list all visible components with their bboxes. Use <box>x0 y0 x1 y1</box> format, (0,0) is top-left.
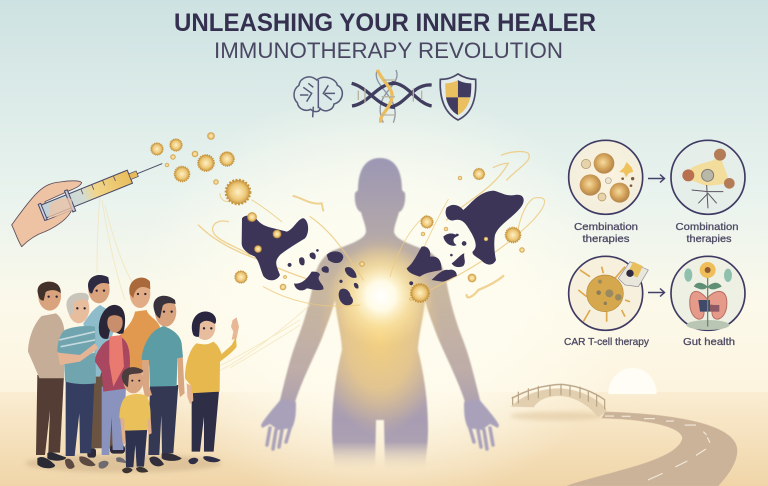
ground shadow <box>25 454 222 473</box>
swirls to family <box>97 195 310 382</box>
bridge shadow <box>510 412 603 420</box>
road dashes <box>605 416 710 480</box>
orange shirt man <box>110 278 160 454</box>
icon: shield <box>440 74 476 120</box>
background ground <box>0 392 768 486</box>
label: combination therapies left <box>574 221 638 245</box>
left hand <box>261 399 296 449</box>
fragments left <box>288 249 359 305</box>
arrow <box>648 174 664 182</box>
grey haired woman <box>57 293 98 469</box>
hand back <box>12 181 82 247</box>
left man <box>28 281 66 468</box>
label: combination therapies left: Cembination <box>574 221 638 233</box>
human silhouette <box>261 158 499 470</box>
woman in pink <box>95 305 130 469</box>
sun <box>608 368 657 394</box>
circle: combination cells <box>569 140 643 214</box>
title: UNLEASHING YOUR INNER HEALER <box>174 9 596 37</box>
man in teal shirt <box>142 296 185 466</box>
label: gut health: Gut health <box>683 336 735 348</box>
label: CAR T-cell therapy: CAR T-cell therapy <box>564 336 650 348</box>
circle: CAR T-cell <box>569 256 648 330</box>
right tumour <box>446 191 524 265</box>
dark tumour masses <box>242 191 524 305</box>
syringe and hand <box>12 153 167 247</box>
icon: DNA helix <box>352 70 432 123</box>
circle: gut health <box>671 256 745 330</box>
panel: therapy circles <box>564 140 745 348</box>
arrow <box>648 288 664 296</box>
label: combination therapies right: Combination <box>676 221 739 233</box>
right hand <box>464 399 499 449</box>
immune cells <box>151 132 524 302</box>
label: combination therapies left: therapies <box>582 233 630 245</box>
energy swirls <box>198 152 545 306</box>
back man <box>83 275 115 458</box>
circle: combination network <box>671 140 745 214</box>
icon: brain <box>294 77 342 117</box>
family group <box>25 275 239 473</box>
subtitle: IMMUNOTHERAPY REVOLUTION <box>214 38 563 63</box>
label: combination therapies right <box>676 221 739 245</box>
bridge <box>511 384 607 417</box>
label: combination therapies right: therapies <box>686 233 732 245</box>
left tumour <box>242 216 308 280</box>
road <box>566 412 737 486</box>
fragments right <box>407 234 466 285</box>
syringe body <box>37 153 167 223</box>
child in yellow <box>119 367 152 473</box>
chest light burst <box>329 244 433 348</box>
road and bridge <box>510 368 737 486</box>
fingers <box>48 198 73 217</box>
woman in yellow waving <box>185 311 239 464</box>
central glow <box>130 90 630 486</box>
